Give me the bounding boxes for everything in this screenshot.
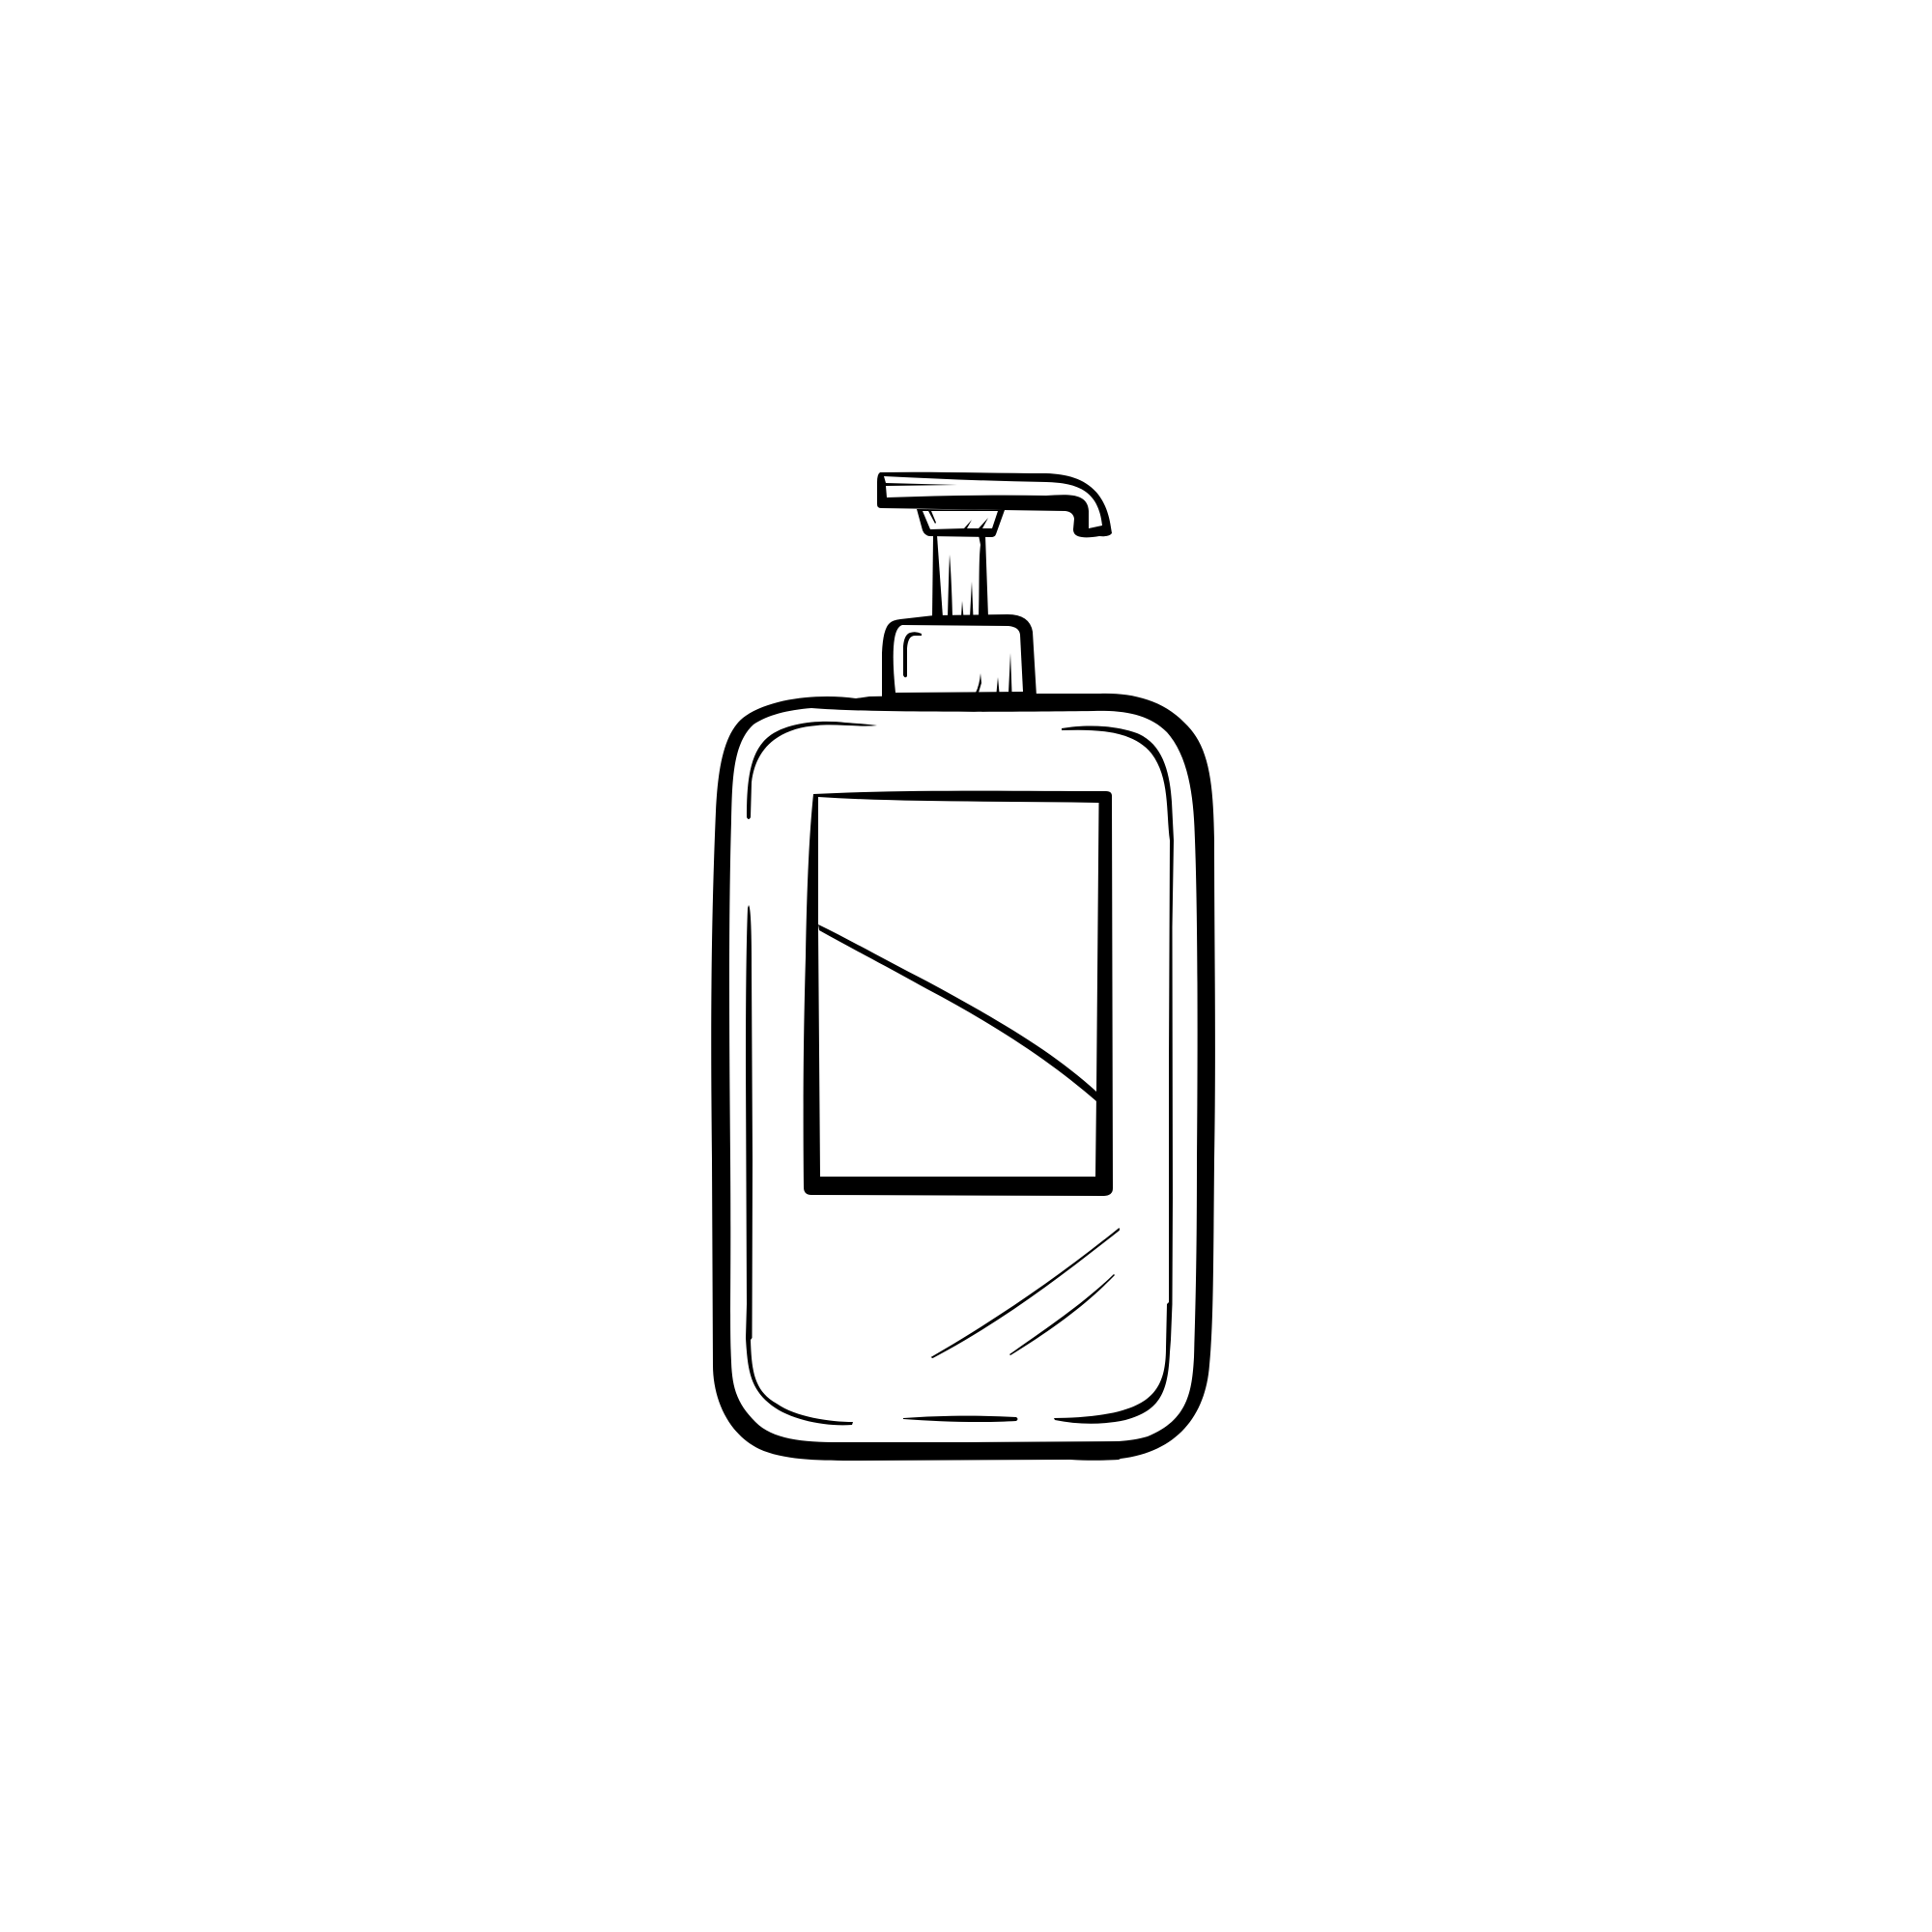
label diagonal stripe — [818, 924, 1096, 1101]
bottle cap — [882, 614, 1037, 696]
inner highlight: top left — [747, 722, 877, 819]
pump spout — [877, 472, 1112, 537]
inner highlight: top right and right side — [1054, 725, 1174, 1424]
pump collar — [917, 509, 1005, 537]
pump stem — [932, 535, 988, 617]
bottle label — [804, 791, 1113, 1196]
gloss line: long — [931, 1228, 1120, 1358]
bottle body outline — [711, 694, 1215, 1461]
inner highlight: bottom centre — [903, 1416, 1018, 1422]
gloss line: short — [1009, 1274, 1115, 1355]
inner highlight: left side and bottom left — [746, 905, 853, 1425]
